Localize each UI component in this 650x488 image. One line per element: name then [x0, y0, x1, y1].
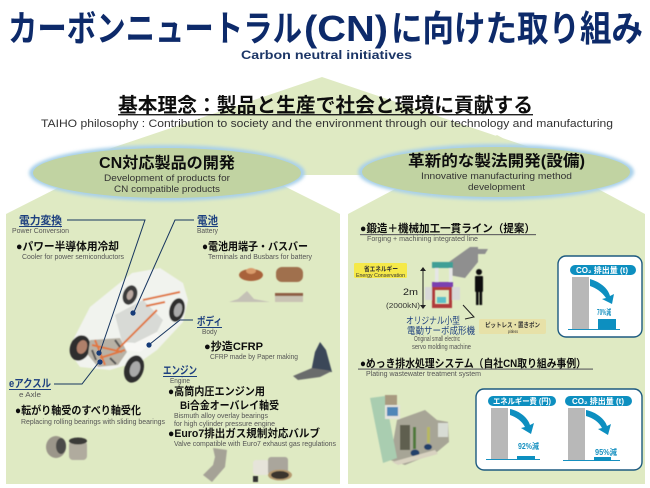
car illustration	[66, 268, 188, 385]
label: servo molding machine: servo molding machine	[412, 344, 471, 351]
item: power semiconductor cooler: ●パワー半導体用冷却	[16, 239, 119, 253]
label: body: ボディ	[197, 314, 222, 328]
item: forging line heading: ●鍛造＋機械加工一貫ライン（提案）	[360, 221, 535, 235]
forming machine illustration	[425, 247, 488, 308]
item: battery terminals: Terminals and Busbars for battery	[208, 254, 312, 261]
item: plating wastewater heading	[358, 356, 593, 378]
item: sliding bearings: Replacing rolling bearings with sliding bearings	[21, 419, 165, 426]
dimension labels: 2m	[403, 287, 418, 298]
person silhouette	[475, 269, 483, 305]
CFRP part photo	[293, 342, 332, 380]
callout: CO2 emission 70 percent	[558, 256, 642, 337]
philosophy subtitle: TAIHO philosophy : Contribution to society and the environment through our technology and manufacturing	[41, 118, 613, 130]
half bearing photo	[203, 448, 227, 482]
arrow: 2m height	[420, 267, 426, 309]
chart: energy cost 92 percent	[486, 396, 556, 460]
oval: manufacturing development: Innovative manufacturing method	[421, 171, 572, 181]
bearing bushes photo	[46, 436, 87, 460]
dimension labels: (2000kN)	[386, 301, 421, 310]
label: servo molding machine: オリジナル小型	[406, 316, 460, 327]
label: e-axle: eアクスル	[9, 377, 51, 390]
label: power conversion: Power Conversion	[12, 228, 69, 235]
label: servo molding machine: 電動サーボ成形機	[407, 325, 475, 337]
item: CFRP	[204, 339, 298, 361]
oval: manufacturing development: 革新的な製法開発(設備)	[408, 151, 585, 170]
chart: energy cost 92 percent: 92%減	[518, 441, 539, 451]
item: forging line heading: Forging + machining integrated line	[367, 236, 478, 243]
philosophy heading: 基本理念：製品と生産で社会と環境に貢献する	[118, 94, 533, 117]
item: Euro7 valve: ●Euro7排出ガス規制対応バルブ	[168, 426, 320, 440]
item: Euro7 valve	[168, 426, 336, 448]
oval: product development: CN compatible products	[114, 184, 221, 194]
title: カーボンニュートラル	[8, 8, 302, 49]
battery parts photos	[229, 267, 303, 302]
oval: product development: CN対応製品の開発	[99, 154, 236, 172]
panel: products	[6, 130, 340, 484]
callout: CO2 emission 70 percent: 70%減	[597, 307, 611, 317]
label: e-axle	[9, 359, 103, 399]
label: body	[146, 314, 222, 348]
item: bismuth alloy bearings	[168, 384, 279, 428]
panel: manufacturing	[348, 135, 645, 484]
item: bismuth alloy bearings: Bi合金オーバレイ軸受	[180, 398, 279, 412]
item: forging line heading	[360, 221, 536, 243]
label: power conversion	[12, 213, 145, 356]
chart: energy cost 92 percent: エネルギー費 (円)	[493, 396, 551, 406]
label: power conversion: 電力変換	[19, 213, 62, 227]
title	[8, 8, 643, 49]
oval: product development: Development of products for	[104, 173, 230, 183]
label: battery: Battery	[197, 228, 218, 235]
chart: CO2 emission 95 percent: CO₂ 排出量 (t)	[572, 396, 624, 406]
item: CFRP: CFRP made by Paper making	[210, 354, 298, 361]
wastewater system photo	[370, 395, 449, 465]
label: servo molding machine	[406, 305, 475, 351]
item: battery terminals: ●電池用端子・バスバー	[202, 239, 308, 253]
item: bismuth alloy bearings: for high cylinder pressure engine	[174, 421, 275, 428]
label: battery	[130, 213, 218, 316]
energy conservation tag	[354, 263, 407, 279]
item: power semiconductor cooler: Cooler for power semiconductors	[22, 254, 124, 261]
item: plating wastewater heading: Plating wastewater treatment system	[366, 371, 481, 378]
item: battery terminals	[202, 239, 312, 261]
label: body: Body	[202, 329, 217, 336]
energy conservation tag: Energy Conservation	[356, 273, 405, 279]
label: engine: Engine	[170, 378, 190, 385]
pitless tag: pitless	[508, 329, 519, 334]
item: plating wastewater heading: ●めっき排水処理システム（自社CN取り組み事例）	[360, 356, 586, 370]
title: (CN)	[304, 8, 388, 49]
oval: manufacturing development: development	[468, 182, 526, 192]
label: servo molding machine: Original small electric	[414, 336, 460, 343]
chart: CO2 emission 95 percent	[563, 396, 632, 461]
energy conservation tag: 省エネルギー	[364, 264, 398, 273]
item: power semiconductor cooler	[16, 239, 124, 261]
callout: energy cost and CO2 reductions	[476, 389, 642, 470]
item: CFRP: ●抄造CFRP	[204, 339, 263, 353]
oval: manufacturing development	[358, 144, 634, 200]
chart: CO2 emission 95 percent: 95%減	[595, 447, 617, 457]
label: battery: 電池	[197, 213, 218, 227]
subtitle: Carbon neutral initiatives	[241, 48, 412, 62]
oval: product development	[29, 145, 305, 201]
dimension labels	[386, 287, 421, 310]
label: e-axle: e Axle	[19, 392, 41, 399]
panel: philosophy triangle	[32, 77, 612, 175]
item: bismuth alloy bearings: Bismuth alloy overlay bearings	[174, 413, 268, 420]
valve photo	[253, 457, 292, 482]
item: sliding bearings: ●転がり軸受のすべり軸受化	[15, 403, 141, 417]
item: sliding bearings	[15, 403, 165, 426]
callout: CO2 emission 70 percent: CO₂ 排出量 (t)	[576, 265, 628, 275]
pitless tag: ピットレス・置きポン	[485, 321, 540, 329]
label: engine: エンジン	[163, 364, 197, 377]
item: bismuth alloy bearings: ●高筒内圧エンジン用	[168, 384, 265, 398]
pitless tag	[479, 319, 546, 334]
item: Euro7 valve: Valve compatible with Euro7 exhaust gas regulations	[174, 441, 336, 448]
label: engine	[163, 364, 197, 385]
